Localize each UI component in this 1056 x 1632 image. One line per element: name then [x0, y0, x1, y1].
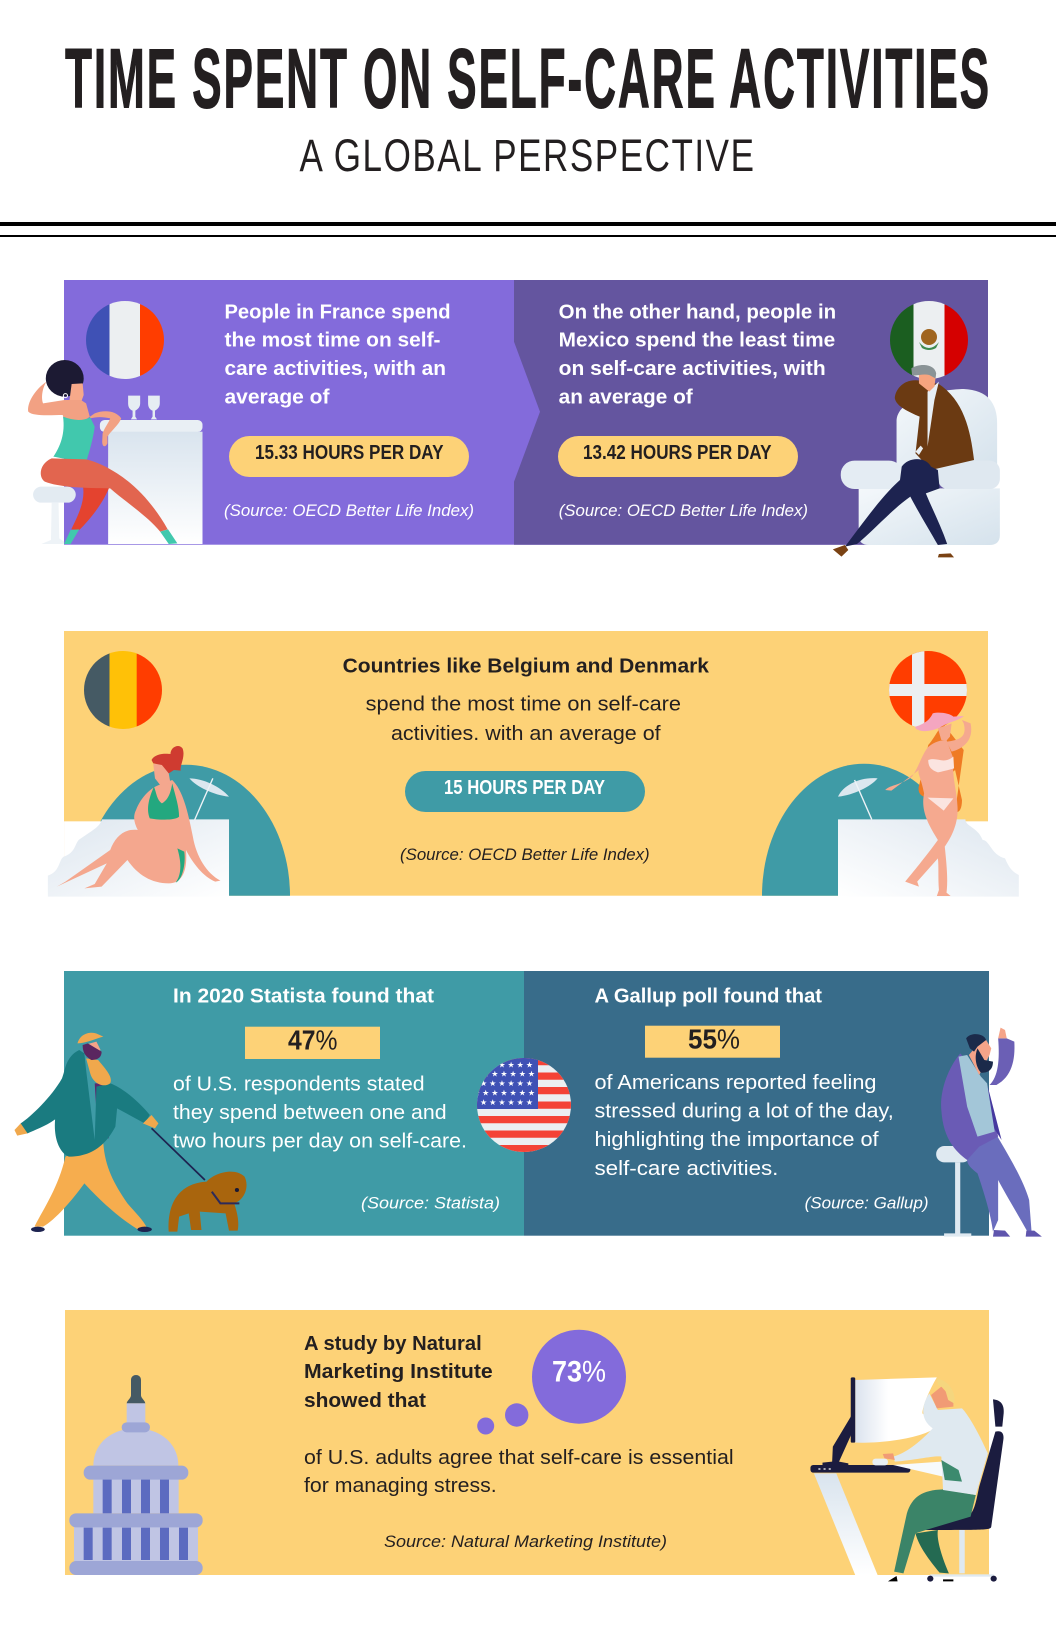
illustration: woman at bar	[28, 360, 203, 544]
illustration: man walking dog	[14, 1033, 247, 1232]
source: Mexico: (Source: OECD Better Life Index)	[559, 501, 808, 520]
text: Statista heading: In 2020 Statista found that	[173, 986, 434, 1008]
text: Statista finding	[173, 1074, 467, 1153]
text: France statement: the most time on self-	[224, 330, 440, 352]
source: France: (Source: OECD Better Life Index)	[224, 501, 474, 520]
panel: Statista and Gallup	[14, 971, 1042, 1237]
pill: 15 hours	[405, 771, 645, 812]
source: Statista: (Source: Statista)	[361, 1193, 500, 1212]
icon: US flag: ★★★★★★	[480, 1098, 533, 1107]
illustration: man in armchair	[833, 365, 1000, 557]
icon: Mexico flag	[890, 300, 970, 380]
text: Belgium and Denmark statement: Countries like Belgium and Denmark	[343, 656, 710, 678]
pill: France hours	[229, 436, 469, 477]
icon: capitol building	[69, 1375, 203, 1575]
text: Mexico statement: On the other hand, people in	[559, 301, 836, 323]
text: France statement: People in France spend	[224, 301, 450, 323]
text: France statement	[224, 301, 450, 408]
text: study finding: for managing stress.	[304, 1475, 497, 1497]
pill: Mexico hours: 13.42 HOURS PER DAY	[583, 442, 772, 464]
panel: France and Mexico	[28, 280, 1000, 557]
panel: Belgium and Denmark	[48, 631, 1019, 896]
text: study heading	[304, 1333, 493, 1412]
text: study finding: of U.S. adults agree that self-care is essential	[304, 1447, 734, 1469]
text: Mexico statement	[559, 301, 836, 408]
text: Belgium and Denmark statement: activities. with an average of	[391, 723, 661, 745]
text: Gallup finding: stressed during a lot of the day,	[594, 1101, 894, 1123]
text: study heading: Marketing Institute	[304, 1361, 493, 1383]
icon: Denmark flag	[889, 650, 967, 730]
icon: Belgium flag	[84, 650, 163, 730]
text: France statement: average of	[224, 386, 330, 408]
text: Mexico statement: on self-care activities, with	[559, 358, 826, 380]
subtitle: A GLOBAL PERSPECTIVE	[300, 130, 756, 181]
illustration: woman in bikini	[762, 712, 1019, 896]
stat: 47%	[245, 1024, 380, 1059]
text: Mexico statement: an average of	[559, 386, 693, 408]
text: Statista finding: two hours per day on self-care.	[173, 1131, 467, 1153]
text: study finding	[304, 1447, 734, 1497]
icon: France flag	[86, 300, 166, 380]
illustration: woman on beach	[48, 746, 290, 896]
text: Gallup finding: highlighting the importance of	[594, 1129, 879, 1151]
icon: US flag: ★★★★★★★	[473, 1088, 535, 1098]
callout: 73% thought bubble	[477, 1330, 626, 1434]
pill: France hours: 15.33 HOURS PER DAY	[255, 442, 444, 464]
text: Gallup finding: of Americans reported feeling	[594, 1072, 876, 1094]
text: Statista finding: they spend between one and	[173, 1102, 447, 1124]
icon: US flag: ★★★★★★	[480, 1079, 533, 1088]
illustration: man on stool	[936, 1028, 1042, 1237]
text: study heading: showed that	[304, 1390, 426, 1412]
callout: 73% thought bubble: 73%	[552, 1356, 606, 1389]
icon: US flag: ★★★★★★★	[473, 1070, 535, 1078]
source: Natural Marketing Institute: Source: Natural Marketing Institute)	[384, 1532, 667, 1551]
text: Gallup finding	[594, 1072, 894, 1180]
source: Gallup: (Source: Gallup)	[805, 1193, 928, 1212]
icon: US flag: ★★★★★★	[480, 1060, 533, 1070]
stat: 47%: 47%	[288, 1024, 338, 1055]
pill: Mexico hours	[558, 436, 798, 477]
illustration: man at computer	[810, 1377, 1004, 1582]
stat: 55%: 55%	[688, 1023, 740, 1054]
text: France statement: care activities, with an	[224, 358, 446, 380]
text: Mexico statement: Mexico spend the least time	[559, 330, 835, 352]
source: OECD: (Source: OECD Better Life Index)	[400, 845, 650, 864]
text: Statista finding: of U.S. respondents stated	[173, 1074, 425, 1096]
text: Gallup heading: A Gallup poll found that	[594, 986, 822, 1008]
text: study heading: A study by Natural	[304, 1333, 482, 1355]
stat: 55%	[645, 1023, 780, 1058]
pill: 15 hours: 15 HOURS PER DAY	[444, 777, 606, 799]
icon: US flag	[473, 1058, 572, 1153]
text: Belgium and Denmark statement	[343, 656, 710, 745]
text: Belgium and Denmark statement: spend the most time on self-care	[366, 694, 681, 716]
text: Gallup finding: self-care activities.	[594, 1158, 778, 1180]
panel: Natural Marketing Institute	[65, 1310, 1004, 1582]
